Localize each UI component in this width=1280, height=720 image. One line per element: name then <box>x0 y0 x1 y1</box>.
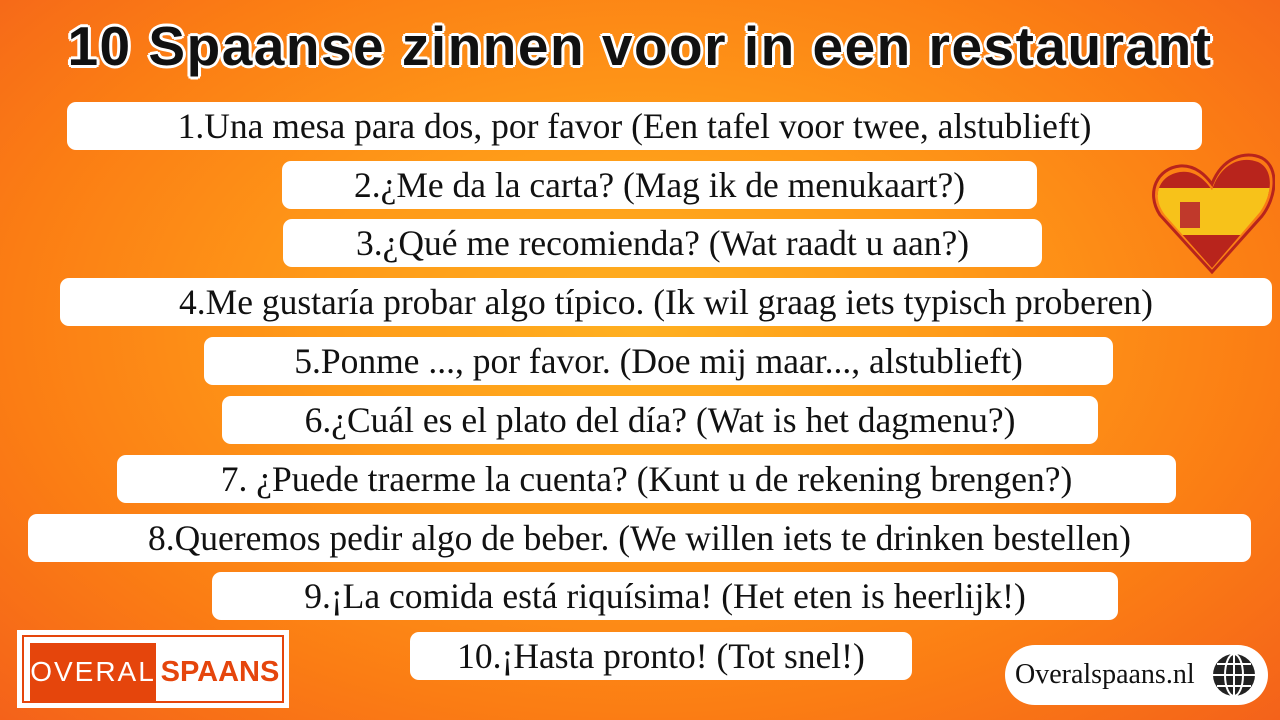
phrase 1: 1.Una mesa para dos, por favor (Een tafel voor twee, alstublieft) <box>178 106 1091 146</box>
title: 10 Spaanse zinnen voor in een restaurant <box>67 15 1213 77</box>
logo: overal spaans <box>17 630 289 708</box>
phrase 2: 2.¿Me da la carta? (Mag ik de menukaart?) <box>354 165 965 205</box>
icon: globe <box>1213 654 1255 696</box>
phrase 5: 5.Ponme ..., por favor. (Doe mij maar..., alstublieft) <box>294 341 1023 381</box>
phrase 3: 3.¿Qué me recomienda? (Wat raadt u aan?) <box>356 223 969 263</box>
phrase 7: 7. ¿Puede traerme la cuenta? (Kunt u de rekening brengen?) <box>221 459 1072 499</box>
phrase 2 <box>282 161 1037 209</box>
phrase 10: 10.¡Hasta pronto! (Tot snel!) <box>457 636 865 676</box>
phrase 6 <box>222 396 1098 444</box>
phrase 7 <box>117 455 1176 503</box>
phrase 3 <box>283 219 1042 267</box>
phrase 9 <box>212 572 1118 620</box>
phrase 4: 4.Me gustaría probar algo típico. (Ik wil graag iets typisch proberen) <box>179 282 1153 322</box>
phrase 10 <box>410 632 912 680</box>
website badge <box>1005 645 1268 705</box>
phrase 8: 8.Queremos pedir algo de beber. (We willen iets te drinken bestellen) <box>148 518 1131 558</box>
phrase 5 <box>204 337 1113 385</box>
phrase 1 <box>67 102 1202 150</box>
icon: spanish heart flag <box>1152 154 1275 274</box>
phrase 4 <box>60 278 1272 326</box>
phrase 8 <box>28 514 1251 562</box>
logo: overal spaans: OVERAL <box>30 656 156 687</box>
website badge: Overalspaans.nl <box>1015 659 1195 690</box>
phrase 9: 9.¡La comida está riquísima! (Het eten is heerlijk!) <box>304 576 1026 616</box>
phrase 6: 6.¿Cuál es el plato del día? (Wat is het dagmenu?) <box>305 400 1015 440</box>
logo: overal spaans: SPAANS <box>161 656 279 688</box>
